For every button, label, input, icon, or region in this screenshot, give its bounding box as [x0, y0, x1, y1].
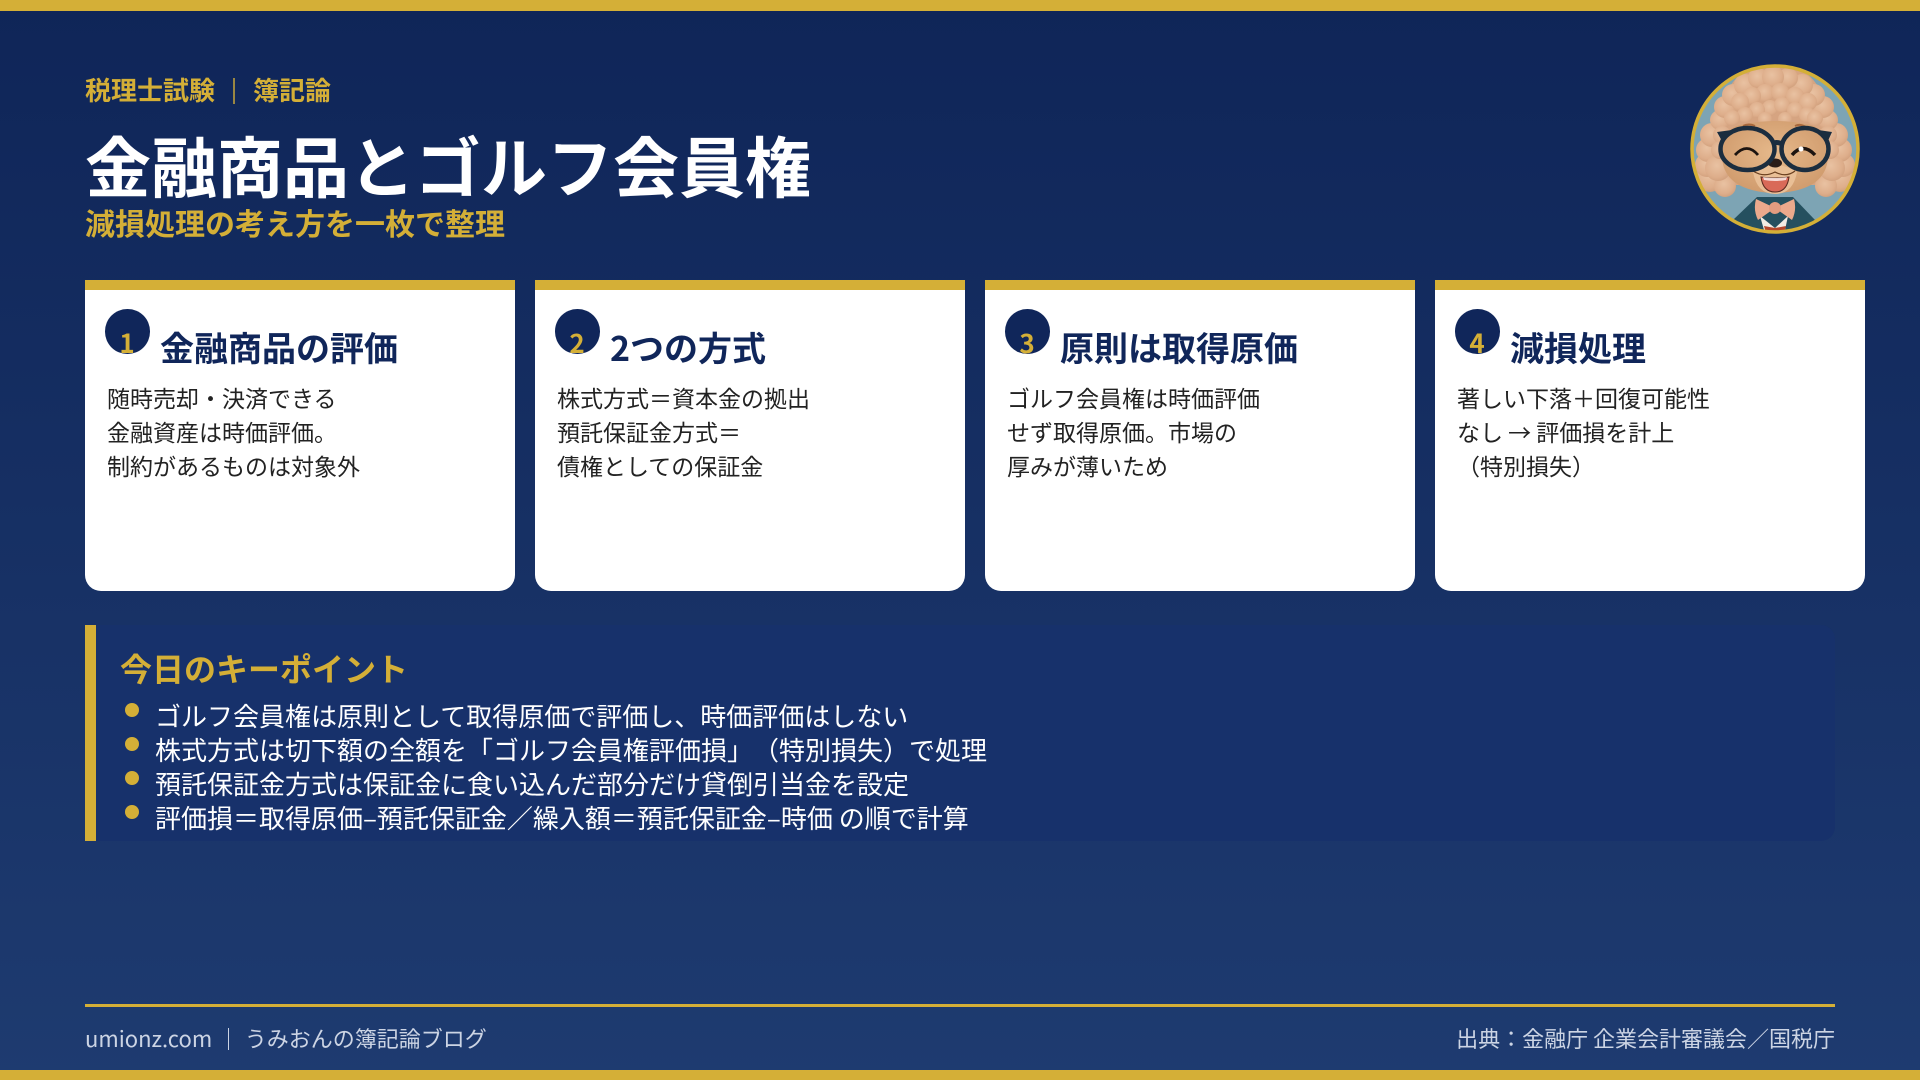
card 4 text: （特別損失） [1457, 448, 1595, 482]
card 2 text: 預託保証金方式＝ [557, 414, 741, 448]
card 4 text: 著しい下落＋回復可能性 [1457, 380, 1710, 414]
key point 3: 預託保証金方式は保証金に食い込んだ部分だけ貸倒引当金を設定 [155, 765, 909, 802]
card 3 text: ゴルフ会員権は時価評価 [1007, 380, 1260, 414]
number badge 1: 1 [119, 324, 135, 361]
bullet 1 [125, 703, 139, 717]
card 1 text [107, 380, 360, 482]
panel: key points [85, 625, 1835, 840]
card 1 text: 制約があるものは対象外 [107, 448, 360, 482]
card 1 text: 金融資産は時価評価。 [107, 414, 337, 448]
bottom gold bar [0, 1070, 1920, 1080]
bullet 4 [125, 805, 139, 819]
panel: card 2 [535, 280, 965, 590]
key point 1: ゴルフ会員権は原則として取得原価で評価し、時価評価はしない [155, 697, 908, 734]
card 4 text: なし → 評価損を計上 [1457, 414, 1674, 448]
card 2 text [557, 380, 810, 482]
title: 金融商品とゴルフ会員権 [85, 116, 811, 212]
number badge 2 [555, 309, 600, 354]
card 3 heading: 原則は取得原価 [1060, 322, 1298, 371]
number badge 3 [1005, 309, 1050, 354]
number badge 4 [1455, 309, 1500, 354]
bullet 3 [125, 771, 139, 785]
panel: card 4 [1435, 280, 1865, 590]
panel: card 3 [985, 280, 1415, 590]
card 1 text: 随時売却・決済できる [107, 380, 337, 414]
card 3 text [1007, 380, 1260, 482]
footer source: 出典：金融庁 企業会計審議会／国税庁 [1456, 1022, 1835, 1054]
card 3 text: せず取得原価。市場の [1007, 414, 1237, 448]
key point 2: 株式方式は切下額の全額を「ゴルフ会員権評価損」（特別損失）で処理 [155, 731, 987, 768]
number badge 3: 3 [1019, 324, 1035, 361]
top gold bar [0, 0, 1920, 10]
key point 4: 評価損＝取得原価–預託保証金／繰入額＝預託保証金–時価 の順で計算 [155, 799, 969, 836]
subtitle: 減損処理の考え方を一枚で整理 [85, 200, 505, 244]
bullet 2 [125, 737, 139, 751]
card 2 text: 債権としての保証金 [557, 448, 763, 482]
card 3 text: 厚みが薄いため [1007, 448, 1168, 482]
number badge 2: 2 [569, 324, 585, 361]
card 2 heading: 2つの方式 [610, 322, 766, 371]
card 1 heading: 金融商品の評価 [160, 322, 398, 371]
card 4 heading: 減損処理 [1510, 322, 1646, 371]
card 4 text [1457, 380, 1710, 482]
key points heading: 今日のキーポイント [120, 645, 408, 691]
footer site name: umionz.com うみおんの簿記論ブログ [85, 1022, 487, 1054]
footer rule [85, 1004, 1835, 1006]
category label: 税理士試験 簿記論 [85, 71, 331, 108]
card 2 text: 株式方式＝資本金の拠出 [557, 380, 810, 414]
number badge 4: 4 [1469, 324, 1485, 361]
icon: poodle mascot avatar [1690, 64, 1860, 234]
number badge 1 [105, 309, 150, 354]
bullet list [125, 697, 987, 836]
panel: card 1 [85, 280, 515, 590]
